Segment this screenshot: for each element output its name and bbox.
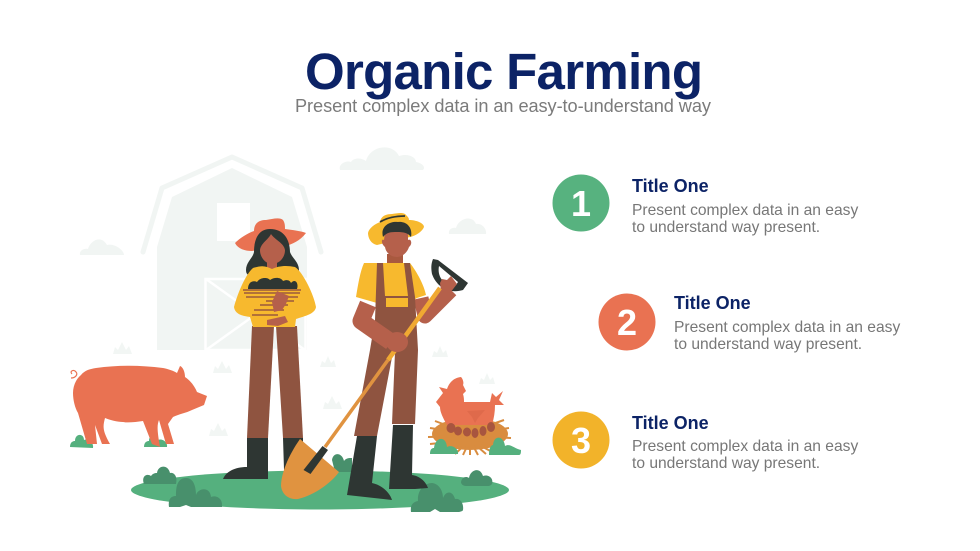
neck (387, 254, 403, 270)
ground (131, 470, 509, 510)
lowered hand (386, 332, 408, 352)
barn window (217, 203, 250, 241)
heading 1: Title One (632, 176, 709, 196)
lowered arm (361, 304, 391, 342)
title: Organic Farming (305, 43, 703, 100)
list item 1: 1 (571, 183, 591, 224)
badge 3 (552, 412, 610, 468)
hat (235, 218, 306, 251)
raised hand (440, 276, 457, 293)
basket (243, 278, 301, 315)
heading 3: Title One (632, 413, 709, 433)
icon: hen on nest (428, 377, 521, 455)
subtitle: Present complex data in an easy-to-understand way (295, 96, 712, 116)
icon: shovel blade (281, 439, 339, 499)
description 1: Present complex data in an easy (632, 202, 858, 219)
raised arm (421, 290, 451, 316)
face (382, 232, 411, 257)
description 3: to understand way present. (632, 455, 820, 472)
hat band (380, 216, 405, 222)
list item 1 (552, 174, 858, 236)
illustration: faded barn background (143, 157, 321, 350)
barn door (206, 279, 306, 350)
produce (248, 278, 298, 289)
description 2: to understand way present. (674, 336, 862, 353)
badge 2 (598, 294, 656, 350)
barn body (157, 168, 307, 350)
bib pocket (386, 298, 408, 307)
right trouser leg (276, 326, 303, 438)
heading 2: Title One (674, 293, 751, 313)
shovel socket (304, 446, 328, 474)
description 1: to understand way present. (632, 219, 820, 236)
list item 3: 3 (571, 420, 591, 461)
icon: pig (71, 366, 207, 447)
hen (436, 377, 504, 425)
clouds (80, 147, 486, 255)
list item 2 (598, 293, 900, 353)
man's right boot (389, 425, 428, 489)
overalls (354, 263, 418, 436)
shirt (356, 263, 426, 305)
list item 2: 2 (617, 302, 637, 343)
hair (246, 229, 299, 276)
shovel handle (388, 288, 440, 360)
neck (267, 256, 277, 270)
left boot (223, 438, 268, 479)
nest (428, 418, 511, 455)
eggs (446, 422, 495, 438)
hat (368, 213, 424, 245)
figure: woman farmer (223, 218, 316, 479)
sweater (234, 266, 316, 327)
nest bushes (430, 438, 521, 455)
description 2: Present complex data in an easy (674, 319, 900, 336)
right boot (283, 438, 303, 470)
hair (382, 222, 411, 237)
figure: man farmer (325, 213, 468, 500)
hen wing (467, 410, 485, 423)
left trouser leg (247, 326, 274, 438)
bright bushes near the pig (70, 435, 167, 448)
bushes (70, 435, 492, 512)
list item 3 (552, 412, 858, 472)
hands (267, 291, 289, 326)
description 3: Present complex data in an easy (632, 438, 858, 455)
face (260, 234, 285, 264)
badge 1 (552, 174, 610, 232)
hoe head (431, 259, 468, 291)
man's left boot (347, 436, 392, 500)
barn roof outline (143, 157, 321, 252)
grass tufts (113, 342, 495, 436)
